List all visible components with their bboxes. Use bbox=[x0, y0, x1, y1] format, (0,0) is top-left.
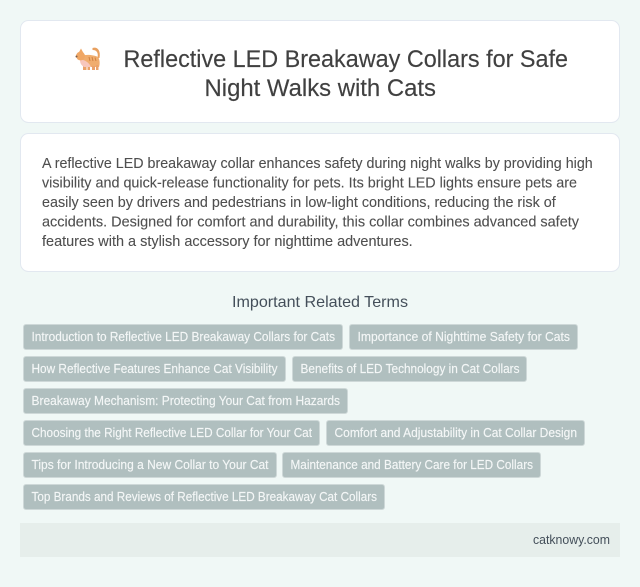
footer bbox=[20, 523, 620, 557]
chip: top brands bbox=[24, 484, 384, 510]
chip: maintenance: Maintenance and Battery Care for LED Collars bbox=[290, 458, 533, 472]
chip: importance bbox=[350, 324, 578, 350]
chip: breakaway mechanism bbox=[24, 388, 348, 414]
chip: introduction: Introduction to Reflective LED Breakaway Collars for Cats bbox=[32, 330, 335, 344]
chip: maintenance bbox=[282, 452, 540, 478]
heading: important related terms: Important Related Terms bbox=[232, 294, 408, 311]
title text: Night Walks with Cats bbox=[204, 75, 436, 102]
description text: A reflective LED breakaway collar enhances safety during night walks by providing high bbox=[42, 155, 593, 172]
chip: led benefits: Benefits of LED Technology in Cat Collars bbox=[300, 362, 520, 376]
chip: led benefits bbox=[292, 356, 526, 382]
footer: catknowy.com bbox=[533, 532, 610, 547]
description text: visibility and quick-release functionality for pets. Its bright LED lights ensure pets are bbox=[42, 174, 577, 192]
chip: choosing collar: Choosing the Right Reflective LED Collar for Your Cat bbox=[32, 426, 312, 440]
description text: easily seen by drivers and pedestrians in low-light conditions, reducing the risk of bbox=[42, 194, 556, 211]
icon: orange cat bbox=[76, 48, 100, 70]
panel: title card bbox=[20, 20, 620, 122]
chip: reflective features bbox=[24, 356, 286, 382]
chip: top brands: Top Brands and Reviews of Reflective LED Breakaway Cat Collars bbox=[32, 490, 377, 504]
title text bbox=[124, 46, 568, 102]
chip: tips bbox=[24, 452, 276, 478]
chip: comfort: Comfort and Adjustability in Cat Collar Design bbox=[334, 426, 577, 440]
chip: breakaway mechanism: Breakaway Mechanism: Protecting Your Cat from Hazards bbox=[32, 394, 340, 408]
chip: introduction bbox=[24, 324, 342, 350]
description text: features with a stylish accessory for nighttime adventures. bbox=[42, 233, 413, 250]
panel: description card bbox=[20, 134, 620, 272]
chip: reflective features: How Reflective Features Enhance Cat Visibility bbox=[32, 362, 278, 376]
chip: tips: Tips for Introducing a New Collar to Your Cat bbox=[32, 458, 269, 472]
title text: Reflective LED Breakaway Collars for Safe bbox=[124, 46, 568, 73]
description text: accidents. Designed for comfort and durability, this collar combines advanced safety bbox=[42, 214, 579, 230]
description text bbox=[42, 155, 593, 250]
chip: choosing collar bbox=[24, 420, 320, 446]
chip: importance: Importance of Nighttime Safety for Cats bbox=[358, 330, 570, 344]
chip: comfort bbox=[326, 420, 584, 446]
